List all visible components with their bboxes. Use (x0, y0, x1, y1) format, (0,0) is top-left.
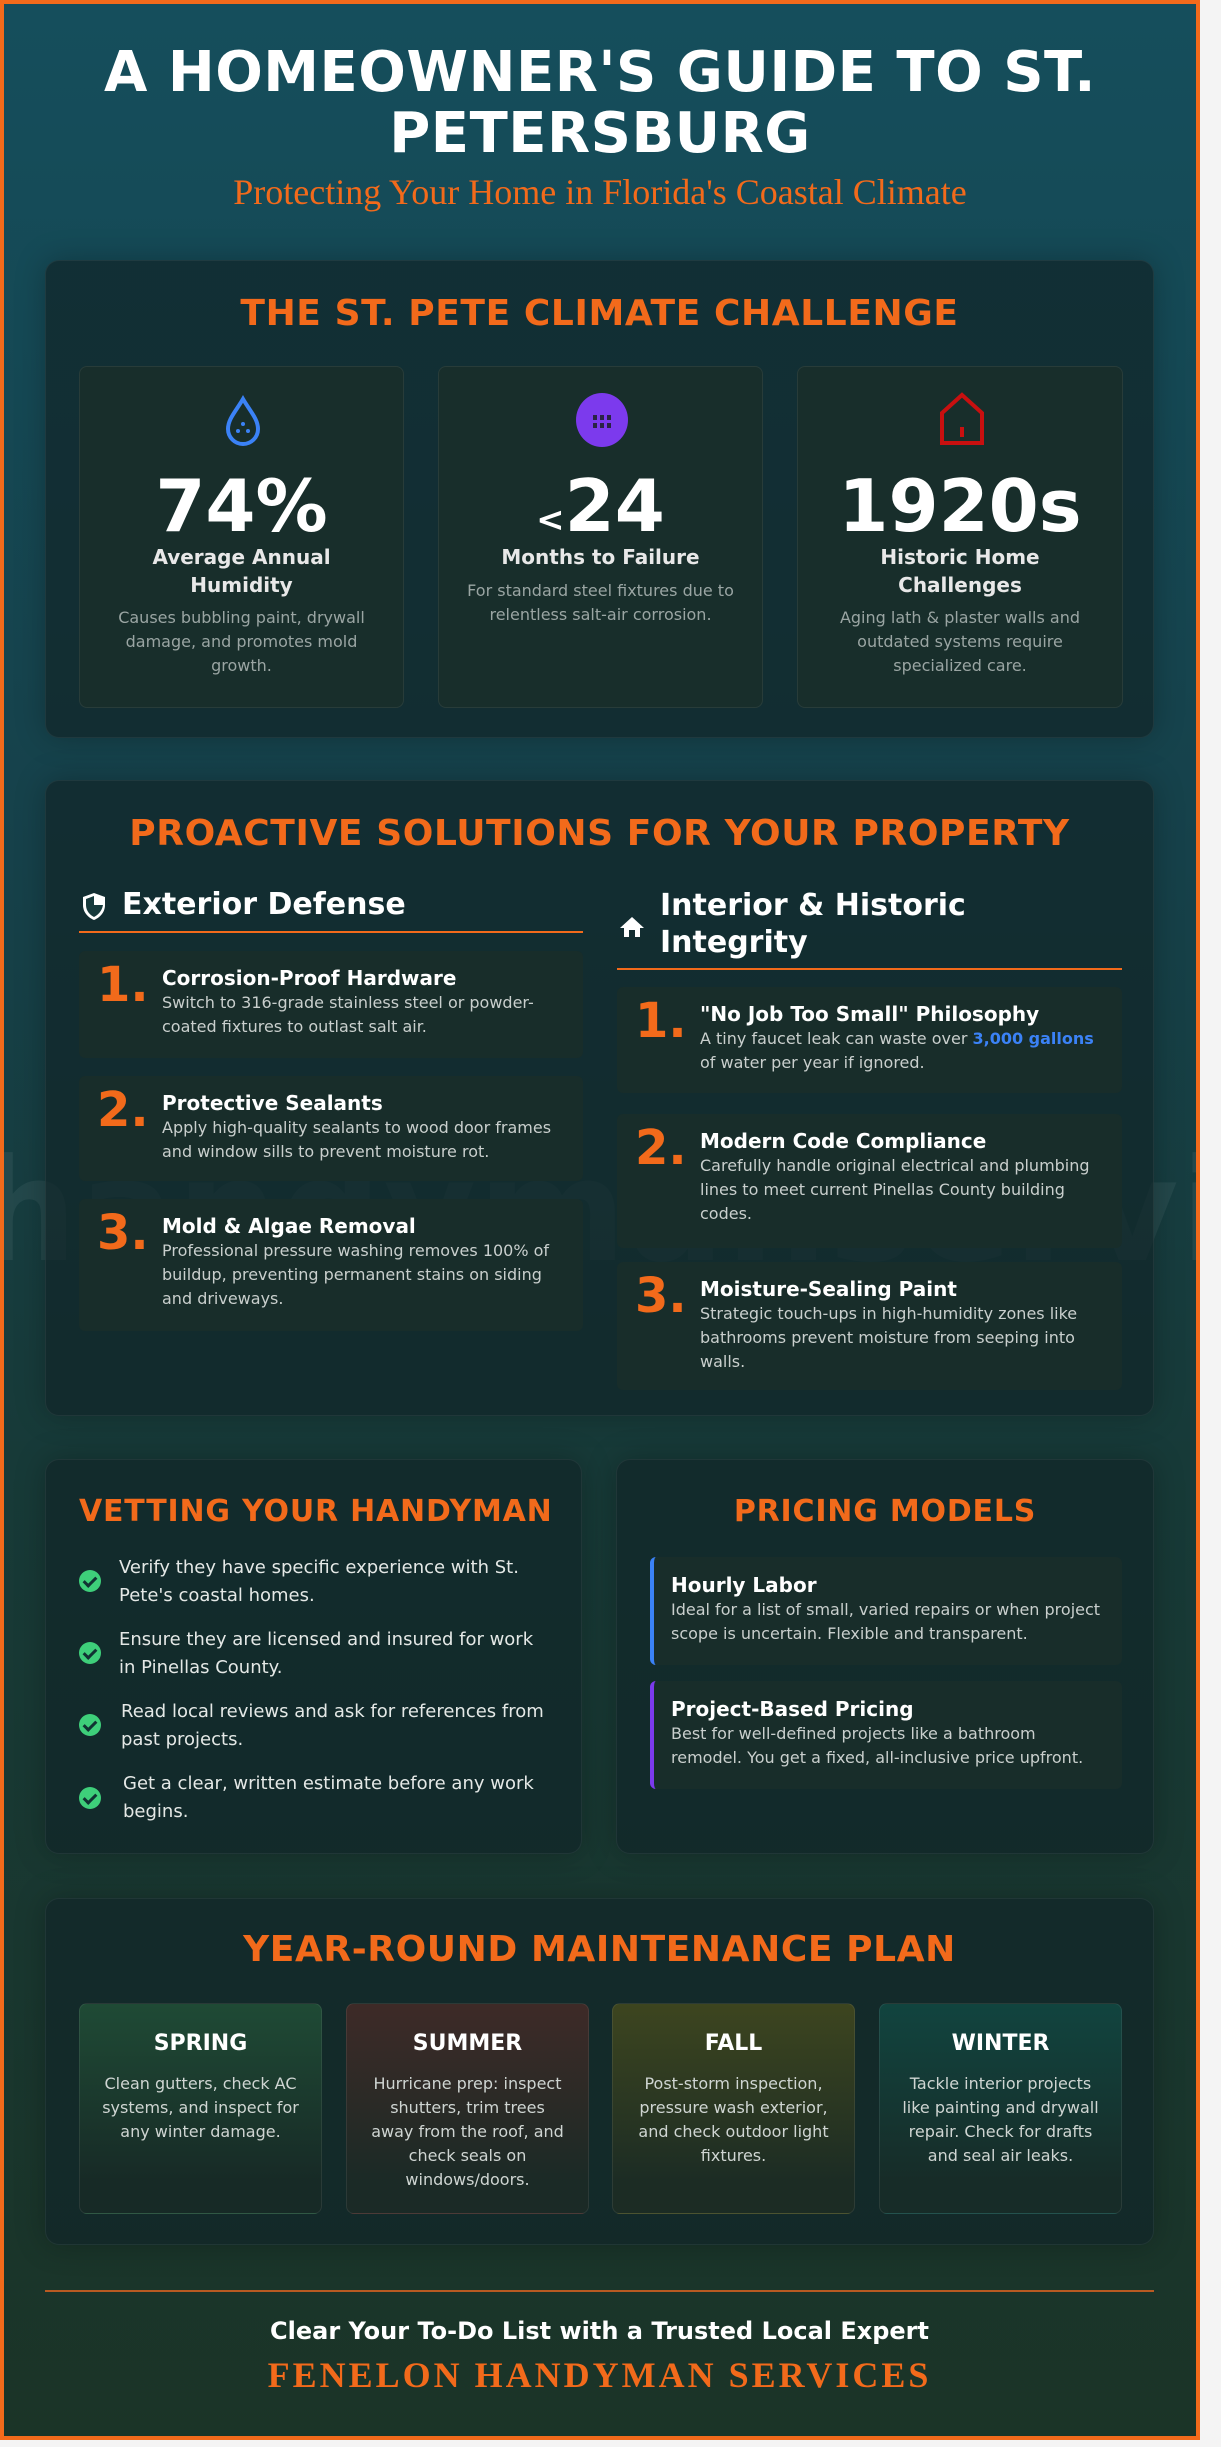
card: project (650, 1681, 1122, 1789)
checklist: Verify they have specific experience with St. Pete's coastal homes. (119, 1557, 519, 1606)
card: historic: Aging lath & plaster walls and outdated systems require specialized care. (840, 608, 1080, 675)
checklist: Ensure they are licensed and insured for work in Pinellas County. (119, 1629, 533, 1678)
item 2: 2. (635, 1120, 687, 1176)
item 2 (79, 1076, 583, 1181)
season: summer (346, 2003, 589, 2214)
season: spring: SPRING (154, 2031, 247, 2056)
item 3: 3. (635, 1268, 687, 1324)
card: months (438, 366, 763, 708)
item 1 (79, 951, 583, 1058)
card: historic: Historic Home Challenges (880, 545, 1040, 597)
season: winter (879, 2003, 1122, 2214)
icon: calendar (576, 393, 628, 447)
season: spring: Clean gutters, check AC systems, and inspect for any winter damage. (102, 2074, 299, 2141)
card: humidity: Average Annual Humidity (152, 545, 331, 597)
season: spring (79, 2003, 322, 2214)
heading: YEAR-ROUND MAINTENANCE PLAN (243, 1929, 956, 1970)
footer: FENELON HANDYMAN SERVICES (268, 2355, 931, 2395)
card: hourly (650, 1557, 1122, 1665)
card: humidity (79, 366, 404, 708)
card: humidity: 74% (155, 464, 328, 548)
icon: shield (83, 893, 105, 920)
item 3: Moisture-Sealing Paint (700, 1277, 957, 1301)
subheading: Integrity (660, 925, 808, 960)
title: PETERSBURG (389, 101, 811, 166)
heading: PROACTIVE SOLUTIONS FOR YOUR PROPERTY (129, 813, 1070, 854)
item 2: Modern Code Compliance (700, 1129, 986, 1153)
card: project: Best for well-defined projects like a bathroom remodel. You get a fixed, all-inclusive price upfront. (671, 1724, 1083, 1767)
season: fall (612, 2003, 855, 2214)
card: months: <24 (536, 464, 665, 548)
item 1 (617, 987, 1122, 1093)
card: historic: 1920s (838, 464, 1082, 548)
card: hourly: Ideal for a list of small, varied repairs or when project scope is uncertain. Flexible and transparent. (671, 1600, 1100, 1643)
subheading (79, 885, 583, 933)
item 1: Corrosion-Proof Hardware (162, 966, 456, 990)
card: hourly: Hourly Labor (671, 1573, 817, 1597)
title (104, 40, 1096, 166)
item 1: 1. (635, 993, 687, 1049)
icon: water drop (226, 395, 260, 446)
item 2: Carefully handle original electrical and plumbing lines to meet current Pinellas County building codes. (700, 1156, 1090, 1223)
item 1: 1. (97, 957, 149, 1013)
subheading (617, 885, 1122, 970)
heading: PRICING MODELS (734, 1494, 1036, 1529)
item 2 (617, 1114, 1122, 1248)
title: A HOMEOWNER'S GUIDE TO ST. (104, 40, 1096, 105)
season: fall: FALL (705, 2031, 762, 2056)
heading: VETTING YOUR HANDYMAN (79, 1494, 553, 1529)
season: winter: WINTER (952, 2031, 1049, 2056)
icon: home (620, 917, 644, 937)
subheading: Exterior Defense (122, 887, 406, 922)
checklist (79, 1557, 544, 1822)
item 3: Mold & Algae Removal (162, 1214, 416, 1238)
item 3: Professional pressure washing removes 100% of buildup, preventing permanent stains on siding and driveways. (162, 1241, 549, 1308)
card: humidity: Causes bubbling paint, drywall damage, and promotes mold growth. (118, 608, 365, 675)
card: historic (797, 366, 1123, 708)
item 2: Apply high-quality sealants to wood door frames and window sills to prevent moisture rot. (162, 1118, 551, 1161)
item 3: Strategic touch-ups in high-humidity zones like bathrooms prevent moisture from seeping into walls. (700, 1304, 1077, 1371)
item 3 (617, 1262, 1122, 1390)
season: fall: Post-storm inspection, pressure wash exterior, and check outdoor light fixtures. (638, 2074, 829, 2165)
item 3: 3. (97, 1205, 149, 1261)
panel: vetting (45, 1459, 582, 1854)
item 1: A tiny faucet leak can waste over 3,000 gallons of water per year if ignored. (700, 1029, 1094, 1072)
footer (45, 2290, 1154, 2410)
season: winter: Tackle interior projects like painting and drywall repair. Check for drafts and seal air leaks. (902, 2074, 1099, 2165)
season: summer: Hurricane prep: inspect shutters, trim trees away from the roof, and check seals on windows/doors. (371, 2074, 564, 2189)
icon: house (940, 392, 984, 445)
panel: maintenance (45, 1898, 1154, 2245)
panel: climate challenge (45, 260, 1154, 738)
column: exterior (79, 887, 583, 1308)
card: project: Project-Based Pricing (671, 1697, 914, 1721)
card: months: For standard steel fixtures due to relentless salt-air corrosion. (467, 581, 734, 624)
subheading: Interior & Historic (660, 888, 966, 923)
item 1: "No Job Too Small" Philosophy (700, 1002, 1039, 1026)
panel: pricing (616, 1459, 1154, 1854)
checklist: Read local reviews and ask for references from past projects. (121, 1701, 544, 1750)
column: interior (617, 888, 1122, 1371)
item 2: 2. (97, 1082, 149, 1138)
heading: THE ST. PETE CLIMATE CHALLENGE (240, 293, 959, 334)
season: summer: SUMMER (413, 2031, 522, 2056)
subtitle: Protecting Your Home in Florida's Coastal Climate (233, 172, 967, 212)
footer: Clear Your To-Do List with a Trusted Local Expert (270, 2317, 929, 2345)
item 1: Switch to 316-grade stainless steel or powder-coated fixtures to outlast salt air. (162, 993, 534, 1036)
item 2: Protective Sealants (162, 1091, 383, 1115)
checklist: Get a clear, written estimate before any work begins. (123, 1773, 534, 1822)
panel: proactive solutions (45, 780, 1154, 1416)
card: months: Months to Failure (501, 545, 700, 569)
item 3 (79, 1199, 583, 1331)
